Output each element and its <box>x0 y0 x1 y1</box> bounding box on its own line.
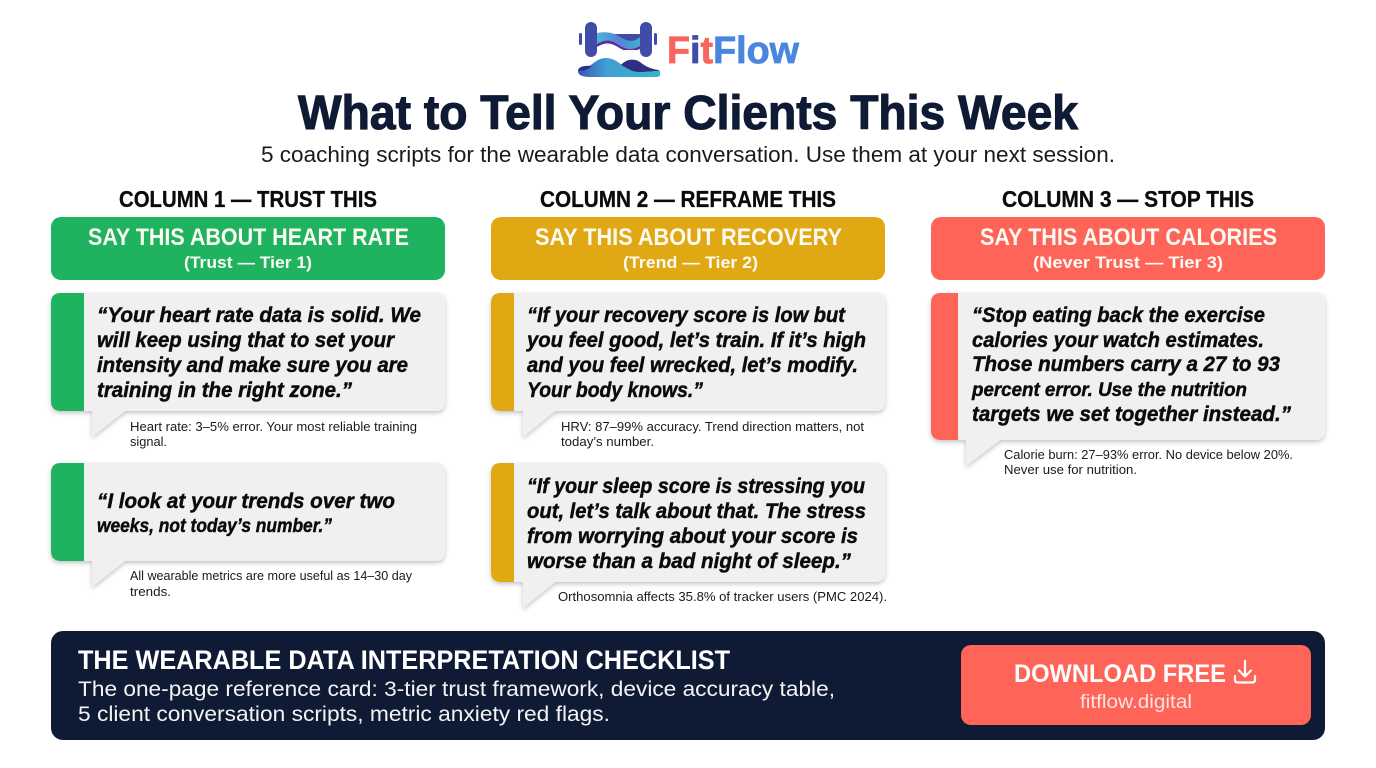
banner heading: THE WEARABLE DATA INTERPRETATION CHECKLIST <box>78 645 730 675</box>
panel: column 1 trust this <box>51 186 445 599</box>
panel: column 2 reframe this <box>491 186 887 608</box>
script card: sleep: from worrying about your score is <box>527 525 858 548</box>
header: recovery: SAY THIS ABOUT RECOVERY <box>535 224 842 251</box>
note: heart rate: signal. <box>130 435 167 449</box>
wordmark: FitFlow <box>667 30 799 72</box>
banner description <box>78 678 835 726</box>
title: What to Tell Your Clients This Week <box>298 87 1078 140</box>
script card: calories: targets we set together instead.” <box>972 403 1291 426</box>
script card: heart rate: will keep using that to set your <box>97 329 396 352</box>
note: recovery: today’s number. <box>561 435 654 449</box>
note: trends: All wearable metrics are more useful as 14–30 day <box>130 569 413 583</box>
column heading 1: COLUMN 1 — TRUST THIS <box>119 186 377 212</box>
script card: trends: weeks, not today’s number.” <box>97 515 332 537</box>
download button <box>961 645 1311 725</box>
script card: sleep: worse than a bad night of sleep.” <box>527 550 851 573</box>
script card: calories: percent error. Use the nutrition <box>971 379 1247 401</box>
script card: calories: “Stop eating back the exercise <box>972 304 1265 327</box>
script card: calories: Those numbers carry a 27 to 93 <box>972 353 1280 376</box>
header: calories <box>931 217 1325 280</box>
script card: heart rate: “Your heart rate data is solid. We <box>97 304 421 327</box>
banner description: 5 client conversation scripts, metric anxiety red flags. <box>78 703 610 726</box>
script card: calories <box>931 293 1325 466</box>
header: recovery: (Trend — Tier 2) <box>623 253 758 272</box>
note: calories <box>1004 448 1293 477</box>
download button: DOWNLOAD FREE <box>1014 660 1226 688</box>
script card: recovery: Your body knows.” <box>527 379 703 402</box>
header: heart rate <box>51 217 445 280</box>
header: heart rate: SAY THIS ABOUT HEART RATE <box>88 224 409 251</box>
note: trends: trends. <box>130 585 171 599</box>
column heading 3: COLUMN 3 — STOP THIS <box>1002 186 1254 212</box>
download button: fitflow.digital <box>1080 692 1192 713</box>
note: recovery <box>561 420 865 449</box>
script card: recovery: you feel good, let’s train. If it’s high <box>526 329 866 352</box>
icon: download arrow <box>1235 661 1255 682</box>
script card: recovery <box>491 293 885 437</box>
header: heart rate: (Trust — Tier 1) <box>184 253 312 272</box>
banner description: The one-page reference card: 3-tier trust framework, device accuracy table, <box>78 678 835 701</box>
script card: trends: “I look at your trends over two <box>97 490 395 513</box>
header: calories: SAY THIS ABOUT CALORIES <box>980 224 1277 251</box>
logo: FitFlow <box>578 22 799 77</box>
panel: checklist banner <box>51 631 1325 740</box>
note: sleep: Orthosomnia affects 35.8% of tracker users (PMC 2024). <box>558 590 887 604</box>
header: recovery <box>491 217 885 280</box>
script card: heart rate <box>51 293 445 437</box>
script card: recovery: “If your recovery score is low but <box>527 304 846 327</box>
script card: sleep <box>491 463 885 608</box>
icon: dumbbell and wave <box>578 22 660 77</box>
script card: sleep: out, let’s talk about that. The stress <box>527 500 866 523</box>
subtitle: 5 coaching scripts for the wearable data conversation. Use them at your next session. <box>261 142 1115 167</box>
note: recovery: HRV: 87–99% accuracy. Trend direction matters, not <box>561 420 865 434</box>
script card: recovery: and you feel wrecked, let’s modify. <box>527 354 858 377</box>
note: calories: Calorie burn: 27–93% error. No device below 20%. <box>1004 448 1293 462</box>
script card: trends <box>51 463 445 587</box>
column heading 2: COLUMN 2 — REFRAME THIS <box>540 186 836 212</box>
note: heart rate <box>130 420 417 449</box>
note: trends <box>130 569 413 599</box>
script card: sleep: “If your sleep score is stressing you <box>527 475 865 498</box>
script card: heart rate: training in the right zone.” <box>97 379 352 402</box>
script card: calories: calories your watch estimates. <box>972 329 1264 352</box>
panel: column 3 stop this <box>931 186 1325 477</box>
header: calories: (Never Trust — Tier 3) <box>1033 253 1223 272</box>
script card: heart rate: intensity and make sure you are <box>97 354 408 377</box>
note: calories: Never use for nutrition. <box>1004 463 1137 477</box>
note: heart rate: Heart rate: 3–5% error. Your most reliable training <box>130 420 417 434</box>
